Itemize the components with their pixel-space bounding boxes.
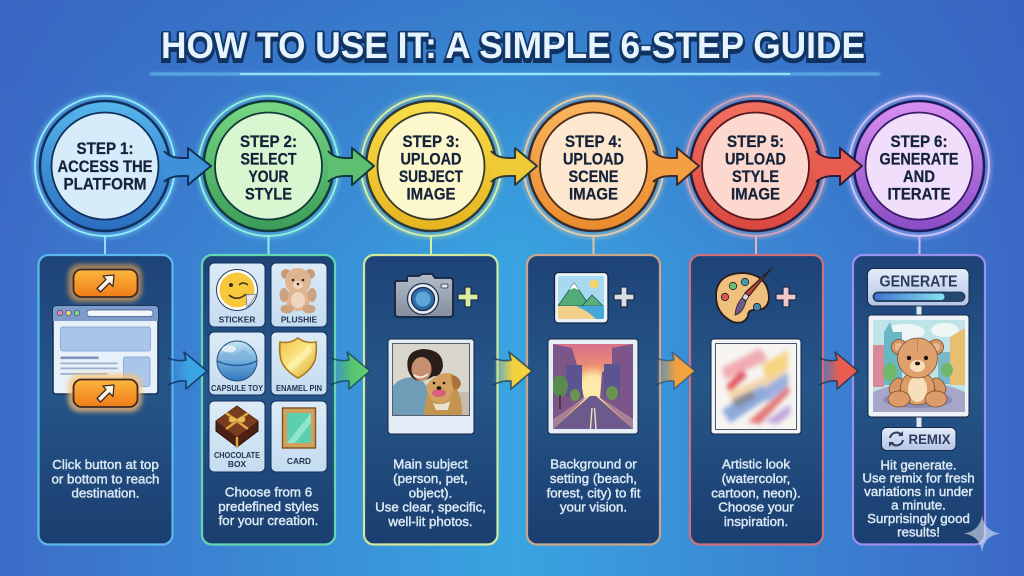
icon: landscape picture [554,272,608,323]
step 2 circle: SELECT [240,150,296,168]
step 5 circle: STYLE [732,168,779,186]
panel 4 text: forest, city) to fit [547,486,641,500]
panel 1 text [52,457,159,500]
icon: plus [776,287,796,307]
arrow: panel 5 to panel 6 [819,352,858,389]
tile: chocolate box [209,401,265,472]
step 3 circle: IMAGE [406,186,456,204]
arrow: panel 1 to panel 2 [168,352,207,389]
panel 4 text: Background or [550,456,637,472]
step 2 circle [198,96,338,236]
arrow: step 5 to step 6 [816,148,862,185]
arrow: panel 2 to panel 3 [331,352,370,389]
panel 5 text: Artistic look [722,456,790,472]
panel 2 text [218,484,319,528]
subject photo [388,339,474,434]
icon: sparkle watermark [964,515,1000,552]
icon: bottom button [68,374,142,412]
tile: enamel pin: ENAMEL PIN [276,383,322,393]
step 3 circle: UPLOAD [400,150,462,168]
step 4 circle: IMAGE [569,186,618,204]
icon: plus [614,287,634,307]
tile: card: CARD [287,456,311,466]
panel 1 text: destination. [71,486,140,500]
watercolor picture [711,339,801,434]
panel 4 text: setting (beach, [550,471,637,486]
step 2 circle: STYLE [245,186,292,204]
step 6 circle: STEP 6: [890,133,948,151]
panel 3 text [375,456,486,529]
tile: sticker [209,263,265,327]
connector lines between generate, image and remix [916,305,922,428]
panel 6 text: a minute. [891,498,946,512]
arrow: step 3 to step 4 [491,148,537,185]
panel 5 text: cartoon, neon). [711,486,801,500]
tile: plushie: PLUSHIE [281,314,318,324]
panel 3 text: object). [409,486,452,500]
panel 6 text [862,458,975,540]
panel 3 text: (person, pet, [393,471,468,486]
icon: browser window [53,306,158,394]
arrow: step 4 to step 5 [653,148,699,185]
panel 5 text [711,456,801,529]
panel 5 text: inspiration. [724,514,788,529]
title: HOW TO USE IT: A SIMPLE 6-STEP GUIDE [161,24,865,66]
step 4 circle: UPLOAD [563,150,624,168]
panel 4 text: your vision. [560,500,627,514]
arrow: step 1 to step 2 [164,148,211,185]
panel 3 text: well-lit photos. [387,514,473,529]
title: HOW TO USE IT: A SIMPLE 6-STEP GUIDE [161,26,865,68]
panel 2 text: Choose from 6 [225,484,312,500]
step 6 circle: AND [903,168,935,186]
tile: enamel pin [271,332,327,395]
remix button [882,428,956,450]
icon: top button [68,264,142,302]
step 3 circle [361,96,501,236]
icon: palette and brush [716,269,771,323]
panel 6 text: Surprisingly good [867,511,970,526]
step 1 circle: PLATFORM [64,176,146,194]
arrow: panel 4 to panel 5 [656,352,695,389]
step 4 circle [524,96,664,236]
panel 5 text: Choose your [718,500,794,514]
panel 1 text: Click button at top [52,457,159,472]
step 1 circle: STEP 1: [76,140,134,158]
panel 5: upload style image [690,255,823,544]
panel 1: access the platform [38,255,172,544]
step 5 circle [686,96,826,236]
generated teddy image [868,315,969,417]
connectors from circles to panels [104,236,920,255]
icon: plus [458,287,478,307]
step 5 circle: IMAGE [731,186,780,204]
step 6 circle: ITERATE [888,186,950,204]
arrow: panel 3 to panel 4 [493,352,532,389]
panel 2 text: predefined styles [218,499,319,514]
tile: chocolate box: BOX [228,459,246,469]
arrow: step 2 to step 3 [328,148,374,185]
tile: plushie [271,263,327,327]
panel 6: generate and iterate [853,255,985,544]
generate button [868,268,969,306]
scene picture [548,339,638,434]
panel 6 text: Use remix for fresh [862,470,975,486]
tile: sticker: STICKER [219,314,255,324]
panel 5 text: (watercolor, [722,471,790,486]
step 6 circle [849,96,989,236]
panel 3: upload subject image [364,255,498,544]
tile: capsule toy [209,332,265,395]
remix button: REMIX [908,432,950,447]
title underline [150,72,880,76]
panel 2: select your style [202,255,335,544]
panel 3 text: Use clear, specific, [375,500,486,514]
panel 2 text: for your creation. [219,513,318,528]
step 5 circle: UPLOAD [725,150,786,168]
step 2 circle: STEP 2: [240,133,297,151]
panel 6 text: variations in under [864,484,973,499]
tile: card [271,401,327,472]
step 3 circle: STEP 3: [402,133,460,151]
step 4 circle: STEP 4: [565,133,622,151]
step 2 circle: YOUR [248,168,289,186]
step 1 circle: ACCESS THE [58,158,152,176]
step 1 circle [35,96,175,236]
panel 4 text [547,456,641,514]
tile: chocolate box: CHOCOLATE [214,450,260,460]
step 5 circle: STEP 5: [727,133,784,151]
step 3 circle: SUBJECT [399,168,463,186]
panel 6 text: results! [897,524,940,540]
tile: capsule toy: CAPSULE TOY [211,383,263,393]
panel 6 text: Hit generate. [880,458,957,472]
panel 3 text: Main subject [393,456,468,472]
icon: camera [395,274,453,317]
generate button: GENERATE [880,274,958,290]
step 4 circle: SCENE [568,168,618,186]
panel 4: upload scene image [527,255,660,544]
panel 1 text: or bottom to reach [52,472,159,486]
step 6 circle: GENERATE [880,150,958,168]
